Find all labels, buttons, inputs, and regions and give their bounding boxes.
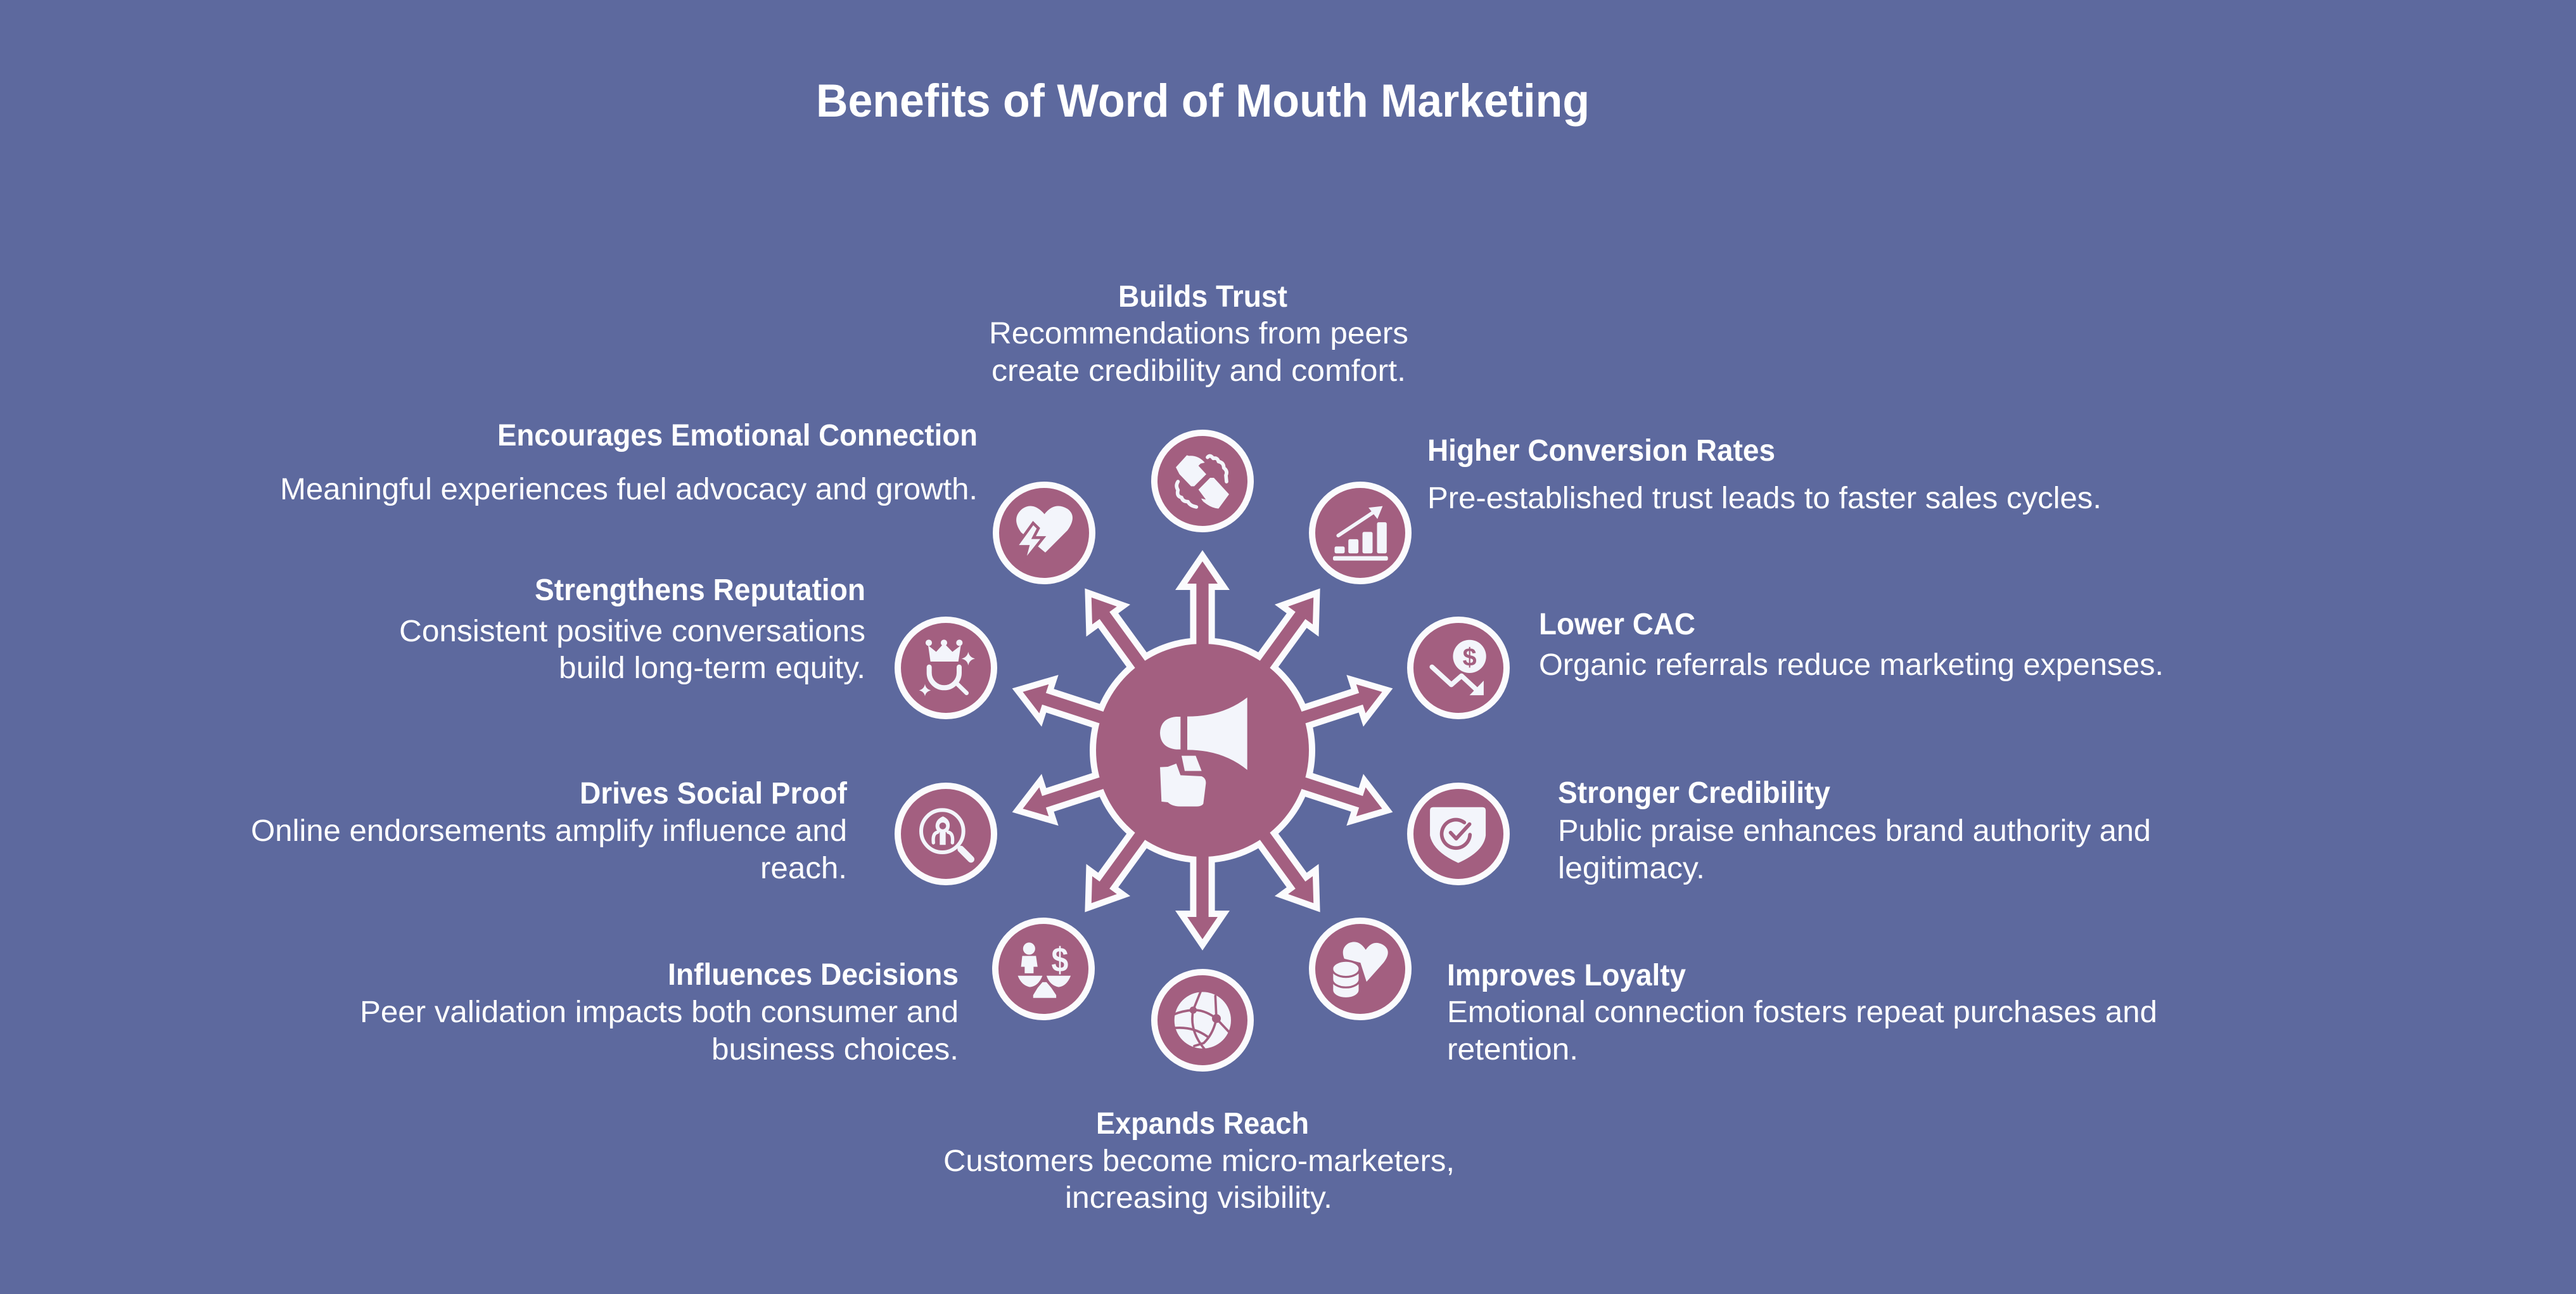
text block: Encourages Emotional Connection: Meaningful experiences fuel advocacy and growth. (280, 473, 978, 506)
text block: Improves Loyalty: Emotional connection fosters repeat purchases and (1447, 996, 2157, 1029)
text block: Drives Social Proof: reach. (760, 852, 847, 885)
arrow: right down (1292, 762, 1394, 831)
text block: Expands Reach (943, 1107, 1455, 1215)
text block: Improves Loyalty: retention. (1447, 1033, 1578, 1067)
title: Benefits of Word of Mouth Marketing (816, 75, 1590, 127)
icon circle: handshake (1154, 433, 1251, 529)
icon circle: loyalty heart and coins (1312, 921, 1408, 1017)
arrow: left down (1011, 762, 1113, 831)
icon circle: growth chart (1312, 485, 1408, 581)
text block: Drives Social Proof (251, 777, 848, 885)
text block: Expands Reach: increasing visibility. (1065, 1181, 1332, 1215)
arrow: up left (1071, 580, 1160, 681)
icon circle: globe (1154, 972, 1251, 1068)
arrow: up right (1245, 580, 1334, 681)
text block: Expands Reach: Expands Reach (1096, 1107, 1309, 1141)
icon circle: scale of people and money: $ (1051, 940, 1068, 979)
text block: Encourages Emotional Connection: Encourages Emotional Connection (497, 419, 978, 452)
text block: Improves Loyalty: Improves Loyalty (1447, 959, 1686, 992)
icon circle: shield check (1410, 786, 1507, 882)
text block: Expands Reach: Customers become micro-marketers, (943, 1144, 1455, 1178)
text block: Lower CAC: Lower CAC (1539, 608, 1695, 641)
icon circle: heart with lightning bolt (996, 485, 1092, 581)
hub ring (1090, 637, 1315, 863)
text block: Lower CAC (1539, 608, 2164, 682)
text block: Encourages Emotional Connection (280, 419, 978, 506)
arrow: down left (1071, 820, 1160, 920)
text block: Stronger Credibility: legitimacy. (1558, 852, 1705, 885)
icon circle: scale of people and money (995, 921, 1092, 1017)
arrow: right up (1292, 670, 1394, 739)
text block: Strengthens Reputation: build long-term equity. (559, 651, 865, 685)
text block: Influences Decisions (360, 958, 959, 1067)
arrow: left up (1011, 670, 1113, 739)
arrow: down (1181, 852, 1224, 945)
text block: Builds Trust: create credibility and comfort. (992, 354, 1406, 388)
text block: Strengthens Reputation (399, 573, 865, 685)
text block: Influences Decisions: Influences Decisions (668, 958, 959, 992)
central hub with megaphone icon (1096, 644, 1309, 857)
text block: Drives Social Proof: Online endorsements amplify influence and (251, 814, 847, 848)
text block: Higher Conversion Rates (1427, 434, 2101, 515)
text block: Builds Trust: Builds Trust (1118, 280, 1287, 314)
text block: Strengthens Reputation: Strengthens Reputation (535, 573, 865, 607)
text block: Strengthens Reputation: Consistent positive conversations (399, 615, 865, 648)
arrow: up (1181, 556, 1224, 649)
text block: Stronger Credibility: Stronger Credibility (1558, 776, 1830, 810)
arrow: down right (1245, 820, 1334, 920)
icon circle: crown and magnifier (898, 620, 994, 716)
text block: Higher Conversion Rates: Higher Conversion Rates (1427, 434, 1775, 468)
text block: Builds Trust (989, 280, 1408, 388)
text block: Builds Trust: Recommendations from peers (989, 317, 1408, 350)
text block: Influences Decisions: Peer validation impacts both consumer and (360, 996, 959, 1029)
text block: Stronger Credibility: Public praise enhances brand authority and (1558, 814, 2151, 848)
icon circle: lower cost (1410, 620, 1507, 716)
icon circle: lower cost: $ (1463, 644, 1477, 672)
text block: Higher Conversion Rates: Pre-established trust leads to faster sales cycles. (1427, 482, 2101, 515)
text block: Lower CAC: Organic referrals reduce marketing expenses. (1539, 648, 2164, 682)
text block: Stronger Credibility (1558, 776, 2151, 885)
text block: Improves Loyalty (1447, 959, 2157, 1067)
icon circle: magnifier with person (898, 786, 994, 882)
text block: Influences Decisions: business choices. (711, 1033, 959, 1067)
text block: Drives Social Proof: Drives Social Proof (580, 777, 848, 810)
